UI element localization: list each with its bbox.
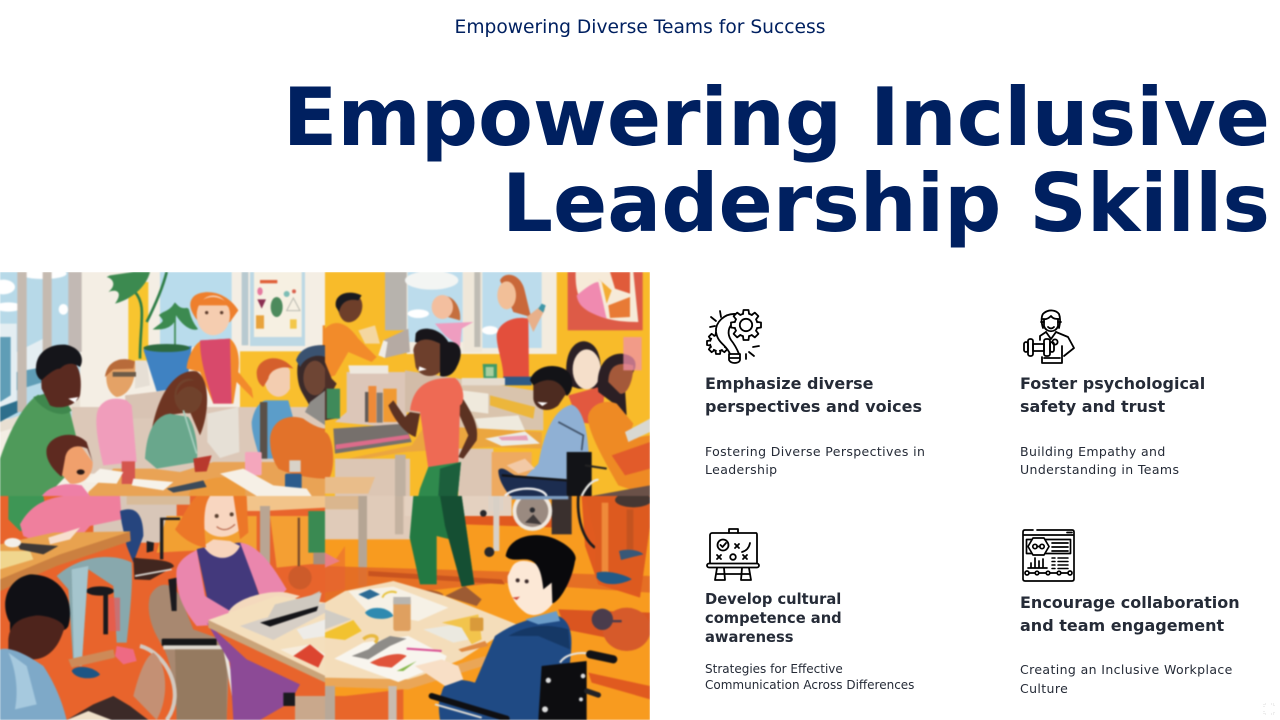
icon: data dashboard	[1022, 529, 1075, 582]
card text: collaboration: Creating an Inclusive Workplace	[1020, 662, 1233, 677]
icon: strategy board	[706, 528, 760, 581]
card text: diverse perspectives: Leadership	[705, 462, 778, 477]
card text: collaboration: Culture	[1020, 681, 1068, 696]
card text: diverse perspectives: Fostering Diverse Perspectives in	[705, 444, 925, 459]
title	[283, 70, 1270, 250]
card heading: psychological safety	[1020, 374, 1205, 416]
card heading: cultural competence: Develop cultural	[705, 591, 841, 608]
subtitle: Empowering Diverse Teams for Success	[455, 16, 825, 38]
title: Leadership Skills	[502, 156, 1270, 250]
card text: psychological safety: Understanding in Teams	[1020, 462, 1179, 477]
card heading: cultural competence	[705, 591, 842, 646]
card heading: diverse perspectives: Emphasize diverse	[705, 374, 873, 393]
corner mark	[1264, 704, 1274, 714]
card heading: diverse perspectives	[705, 374, 922, 416]
card heading: collaboration: and team engagement	[1020, 616, 1224, 635]
card text: cultural competence	[705, 662, 914, 692]
icon: lightbulb and gears	[706, 309, 762, 364]
card heading: diverse perspectives: perspectives and voices	[705, 397, 922, 416]
card text: psychological safety: Building Empathy and	[1020, 444, 1166, 459]
icon: man with dumbbell	[1023, 310, 1075, 364]
card text: cultural competence: Strategies for Effective	[705, 662, 843, 676]
title: Empowering Inclusive	[283, 70, 1270, 164]
illustration: inclusive classroom	[0, 272, 650, 720]
card heading: cultural competence: awareness	[705, 629, 794, 646]
card heading: psychological safety: Foster psychological	[1020, 374, 1205, 393]
card text: collaboration	[1020, 662, 1233, 696]
card heading: cultural competence: competence and	[705, 610, 842, 627]
card text: diverse perspectives	[705, 444, 925, 477]
card text: psychological safety	[1020, 444, 1179, 477]
card heading: collaboration	[1020, 593, 1240, 635]
card heading: psychological safety: safety and trust	[1020, 397, 1165, 416]
card text: cultural competence: Communication Across Differences	[705, 678, 914, 692]
card heading: collaboration: Encourage collaboration	[1020, 593, 1240, 612]
